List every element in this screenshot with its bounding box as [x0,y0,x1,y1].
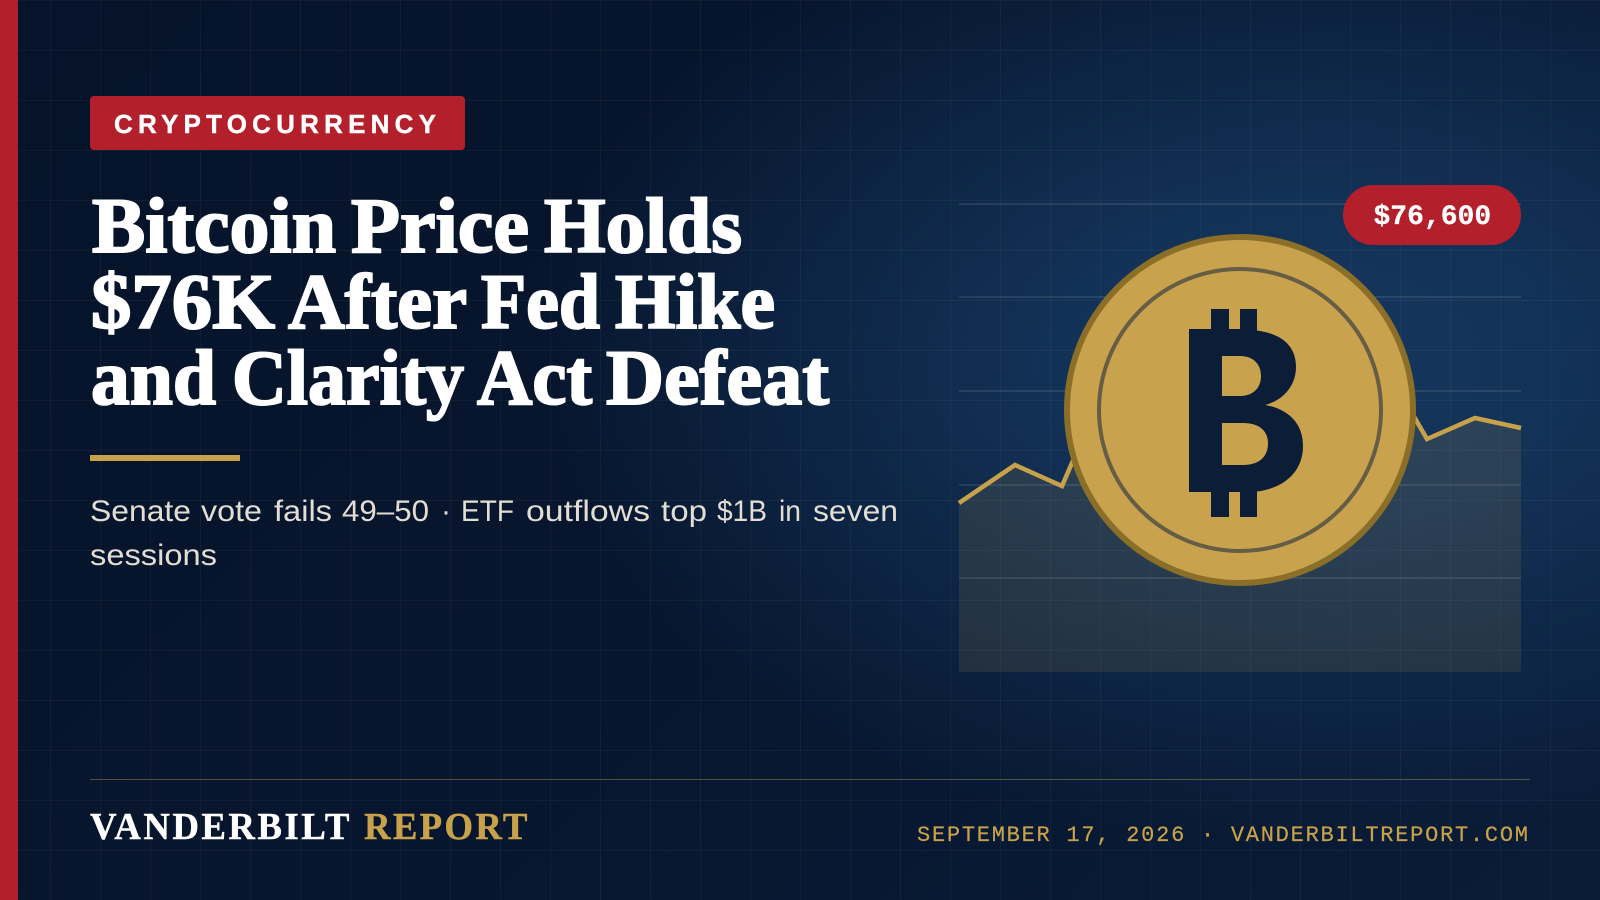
subtitle: 49–50 [342,495,429,528]
subtitle: vote [201,495,262,528]
headline: Fed [481,258,600,345]
subtitle: ETF [461,495,514,528]
subtitle: Senate [90,495,191,528]
subtitle: fails [274,495,332,528]
price chart [959,204,1521,672]
headline: Hike [615,258,775,345]
headline: After [288,258,467,345]
chart line [959,358,1521,503]
headline: Clarity [232,334,464,421]
category badge: CRYPTOCURRENCY [114,109,436,139]
brand wordmark: VANDERBILT [90,807,352,848]
red accent bar [0,0,18,900]
headline: Defeat [606,334,829,421]
subtitle: outflows [526,495,650,528]
brand wordmark: REPORT [364,807,530,848]
subtitle: seven [813,495,898,528]
subtitle: $1B [717,495,767,528]
headline: Holds [544,182,742,269]
headline: Bitcoin [92,182,336,269]
headline: and [91,334,216,421]
headline: $76K [91,258,275,345]
gold divider [90,455,240,461]
headline: Price [351,182,529,269]
subtitle: sessions [90,539,217,572]
subtitle: top [661,495,707,528]
price callout [1343,185,1521,245]
subtitle [90,495,898,572]
price callout: $76,600 [1374,202,1491,233]
brand wordmark [90,807,530,848]
date and site: SEPTEMBER 17, 2026 · VANDERBILTREPORT.COM [917,823,1528,848]
headline [91,182,829,421]
category badge [90,96,465,150]
footer rule [90,779,1530,780]
headline: Act [477,334,592,421]
chart area fill [959,358,1521,672]
subtitle: in [779,495,801,528]
subtitle: · [441,495,451,528]
icon: bitcoin coin [1067,237,1413,583]
